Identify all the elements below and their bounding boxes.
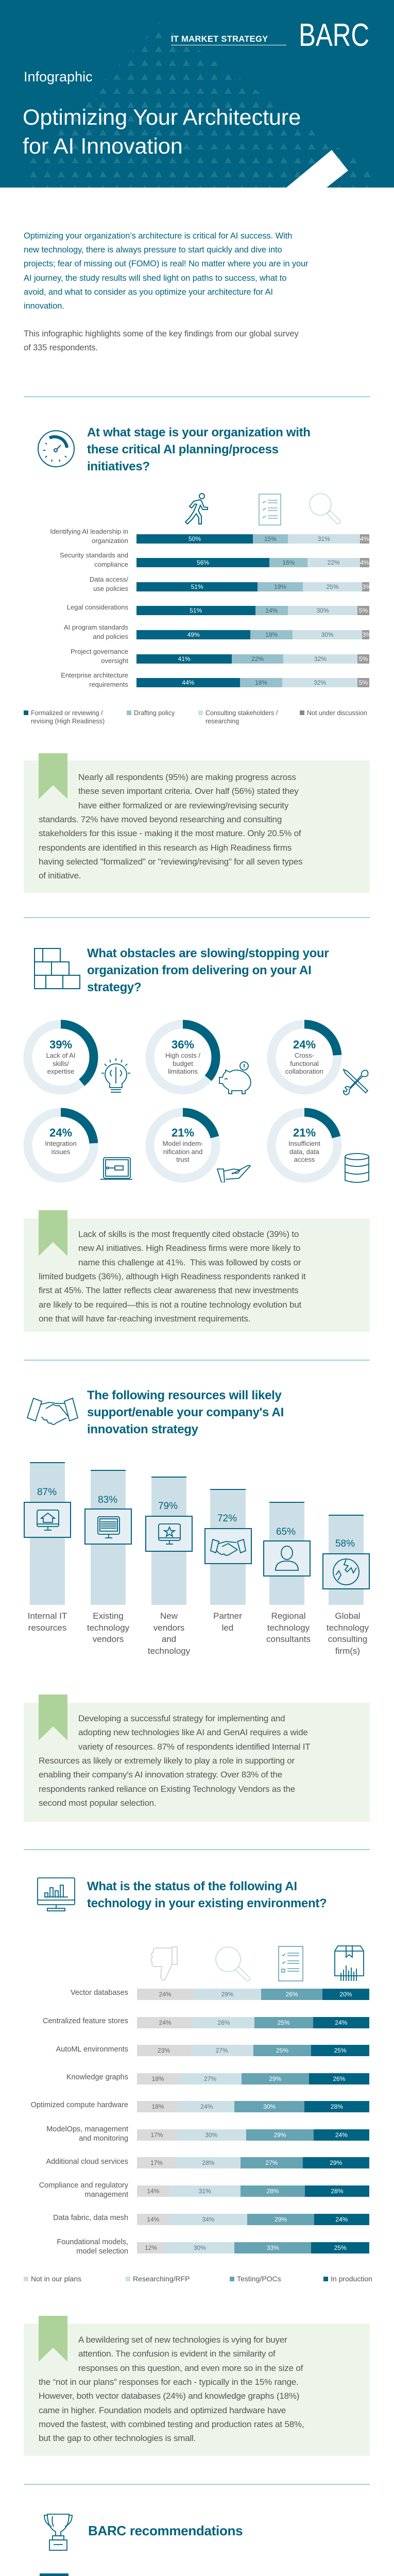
title	[23, 105, 301, 159]
chart 2 labels: ModelOps, management	[46, 2125, 128, 2133]
bars: chart 2: 30%	[205, 2131, 217, 2139]
heading: these critical AI planning/process	[87, 443, 279, 456]
icon: runner	[184, 493, 208, 524]
bars: chart 2: 31%	[199, 2188, 211, 2195]
donut: insufficient data: data, data	[289, 1148, 319, 1155]
icon: checklist	[278, 1946, 304, 1982]
icon: box	[334, 1945, 365, 1982]
bars: chart 2: 24%	[200, 2103, 213, 2110]
bars: chart 2: 18%	[152, 2075, 164, 2082]
bars: chart 2: 26%	[286, 1991, 298, 1998]
callout 3	[24, 1703, 370, 1822]
chart 2 labels: Optimized compute hardware	[31, 2101, 128, 2109]
intro text: avoid, and what to consider as you optimize your architecture for AI	[24, 287, 273, 297]
callout 2: are likely to be required—this is not a routine technology evolution but	[39, 1300, 301, 1310]
bars: chart 2: 25%	[334, 2244, 347, 2251]
callout 1: stakeholders for this issue - making it the most mature. Only 20.5% of	[39, 828, 301, 838]
bars: chart 2: 24%	[335, 2216, 348, 2223]
donut: costs: budget	[173, 1059, 193, 1067]
callout text	[78, 772, 299, 810]
icon: database	[345, 1153, 369, 1183]
survey note: of 335 respondents.	[24, 343, 98, 352]
legend: chart 1: Consulting stakeholders /	[205, 709, 278, 717]
bars: chart 2: 18%	[152, 2103, 164, 2110]
bars: chart 2: 25%	[334, 2047, 347, 2054]
donut: model indemnification: 21%	[172, 1126, 194, 1139]
donut: integration	[45, 1126, 77, 1155]
column chart: resources: 72%	[217, 1513, 237, 1524]
callout text: new AI initiatives. High Readiness firms were more likely to	[78, 1243, 300, 1253]
column chart: resources	[24, 1462, 370, 1656]
chart 2 labels: Vector databases	[71, 1989, 128, 1997]
decorative triangle pattern	[30, 23, 371, 188]
bars: chart 2: 20%	[339, 1991, 352, 1998]
bars: chart 2: 24%	[159, 1991, 172, 1998]
chart 2 column icons	[147, 1945, 366, 1984]
heading: The following resources will likely	[87, 1388, 282, 1402]
heading	[87, 1388, 284, 1436]
intro text: AI journey, the study results will shed light on paths to success, what to	[24, 274, 286, 283]
heading	[87, 426, 311, 473]
bars: chart 2: 23%	[158, 2047, 170, 2054]
chart 2 labels: Data fabric, data mesh	[53, 2214, 128, 2222]
icon: brick wall	[34, 948, 80, 989]
chart 1 row labels: Enterprise architecture	[61, 671, 128, 679]
bars: chart 2: 12%	[145, 2244, 157, 2251]
bars: chart 1: 51%	[191, 583, 203, 590]
chart 1 row labels: AI program standards	[64, 623, 128, 631]
column chart: resources: technology	[148, 1646, 190, 1656]
icon: magnifier	[309, 493, 341, 524]
column chart: resources: firm(s)	[335, 1646, 360, 1656]
chart 2 labels: Centralized feature stores	[43, 2017, 128, 2025]
heading: BARC recommendations	[88, 2523, 243, 2538]
bars: chart 2: 27%	[216, 2047, 228, 2054]
bars: chart 2: 24%	[335, 2019, 347, 2026]
chart 1 row labels: use policies	[93, 584, 128, 592]
donut: insufficient data	[288, 1126, 320, 1163]
icon: tools	[342, 1069, 369, 1095]
chart 1 row labels: Security standards and	[60, 551, 128, 559]
callout 2: one that will have far-reaching investment requirements.	[39, 1314, 250, 1324]
bars: chart 2: 17%	[150, 2131, 163, 2139]
donut: collaboration: 24%	[293, 1038, 316, 1051]
chart 2 labels: Foundational models,	[57, 2238, 128, 2246]
callout text: responses on this question, and even more so in the size of	[78, 2363, 303, 2373]
bars: chart 2: 28%	[202, 2159, 214, 2166]
callout 2	[24, 1218, 370, 1332]
chart 1 row labels	[50, 528, 128, 688]
bars: chart 2: 29%	[273, 2131, 286, 2139]
bars: chart 1: 5%	[359, 655, 368, 663]
donut: model indemnification: trust	[176, 1156, 190, 1163]
bars: chart 2: 30%	[263, 2103, 276, 2110]
callout text: name this challenge at 41%. This was followed by costs or	[78, 1258, 301, 1267]
heading: innovation strategy	[87, 1422, 198, 1436]
header banner	[0, 0, 394, 188]
icon box: existing vendors	[84, 1509, 132, 1545]
chart 1 row labels: compliance	[94, 561, 128, 568]
bars: chart 2: 17%	[150, 2159, 163, 2166]
donut: collaboration	[285, 1038, 323, 1075]
ribbon	[39, 1694, 67, 1740]
legend: chart 1: Not under discussion	[307, 709, 367, 717]
donut: lack of skills: 39%	[49, 1038, 72, 1051]
callout text: these seven important criteria. Over half (56%) stated they	[78, 786, 299, 796]
donut: integration: issues	[52, 1148, 70, 1155]
callout 1: of initiative.	[39, 871, 81, 880]
callout 2: first at 45%. The latter reflects clear awareness that new investments	[39, 1285, 298, 1295]
donut: lack of skills: Lack of AI	[46, 1052, 76, 1059]
heading: strategy?	[87, 980, 141, 994]
bars: chart 2: 14%	[147, 2216, 159, 2223]
donut: lack of skills	[46, 1038, 76, 1075]
bars: chart 2: 29%	[330, 2159, 342, 2166]
intro text: innovation.	[24, 301, 64, 311]
chart 2 labels: AutoML environments	[56, 2045, 128, 2054]
donut: lack of skills: expertise	[47, 1067, 74, 1075]
bars: chart 1: 41%	[178, 655, 191, 663]
heading: What is the status of the following AI	[87, 1879, 297, 1893]
icon: handshake	[27, 1397, 78, 1425]
icon: trophy	[43, 2512, 73, 2551]
donut: insufficient data: 21%	[293, 1126, 316, 1139]
column labels	[28, 1611, 67, 1632]
column chart: resources: Global	[335, 1611, 361, 1621]
bars: chart 2: 33%	[267, 2244, 279, 2251]
bars: chart 1: 5%	[359, 679, 368, 686]
icon: checklist	[259, 494, 281, 526]
bars: chart 2: 24%	[159, 2019, 172, 2026]
chart 2 labels: Compliance and regulatory	[39, 2181, 128, 2190]
donut: integration: Integration	[45, 1140, 77, 1147]
legend: chart 1	[24, 709, 367, 725]
callout 4: However, both vector databases (24%) and knowledge graphs (18%)	[39, 2391, 299, 2401]
donut: costs: limitations	[168, 1067, 198, 1075]
donut: model indemnification: nification and	[163, 1148, 202, 1155]
callout text: adopting new technologies like AI and GenAI requires a wide	[78, 1727, 308, 1737]
bars: chart 2: 26%	[218, 2019, 230, 2026]
intro text: projects; fear of missing out (FOMO) is real! No matter where you are in your	[24, 259, 309, 268]
bars: chart 1: 18%	[255, 679, 267, 686]
callout text: A bewildering set of new technologies is vying for buyer	[78, 2335, 287, 2345]
survey note: This infographic highlights some of the key findings from our global survey	[24, 329, 299, 338]
bars: chart 1: 32%	[314, 655, 327, 663]
callout 1	[24, 760, 370, 893]
legend: chart 1: Drafting policy	[134, 709, 175, 717]
bars: chart 1: 56%	[197, 559, 209, 566]
callout 4	[24, 2324, 370, 2456]
heading: technology in your existing environment?	[87, 1896, 327, 1910]
legend: chart 2: Researching/RFP	[133, 2275, 190, 2283]
logo: IT Market Strategy: IT MARKET STRATEGY	[171, 35, 268, 44]
bars: chart 2: 29%	[269, 2075, 281, 2082]
callout 4: the “not in our plans” responses for each - typically in the 15% range.	[39, 2377, 299, 2387]
heading: support/enable your company's AI	[87, 1405, 284, 1419]
callout 3: enabling their company's AI innovation strategy. Over 83% of the	[39, 1770, 282, 1780]
chart 1 row labels: requirements	[89, 680, 128, 688]
column chart: resources: 58%	[335, 1538, 355, 1549]
column chart: resources: and	[162, 1634, 176, 1644]
section 3: resources	[27, 1388, 284, 1436]
logo: IT Market Strategy	[171, 34, 286, 45]
label: Infographic: Infographic	[24, 69, 93, 84]
callout 1: respondents are identified in this research as High Readiness firms	[39, 843, 292, 853]
bars: chart 2: 28%	[331, 2103, 343, 2110]
bars: chart 1: 32%	[314, 679, 326, 686]
column labels: Internal IT	[28, 1611, 67, 1621]
column chart: resources: vendors	[153, 1623, 184, 1632]
chart 2 labels: Knowledge graphs	[66, 2073, 128, 2081]
bars	[30, 1462, 65, 1605]
bars: chart 1: 25%	[326, 583, 339, 590]
section 2: obstacles	[34, 946, 329, 994]
column chart: resources: Partner	[213, 1611, 242, 1621]
callout 4: came in higher. Foundation models and optimized hardware have	[39, 2405, 286, 2415]
callout 1: having selected "formalized" or "reviewing/revising" for all seven types	[39, 857, 302, 867]
column chart: resources: led	[222, 1623, 233, 1632]
chart 2 labels: management	[84, 2191, 128, 2199]
ribbon	[39, 2316, 67, 2362]
icon box: internal IT	[24, 1502, 71, 1538]
legend: chart 1: researching	[205, 718, 239, 725]
icon: thumbs down	[149, 1946, 180, 1982]
icon box: regional consultants	[263, 1540, 311, 1577]
legend: chart 1: Formalized or reviewing /	[31, 709, 103, 717]
column chart: resources: vendors	[93, 1634, 124, 1644]
bars: chart 1: 49%	[187, 631, 200, 638]
icon: hand	[216, 1165, 251, 1182]
heading: At what stage is your organization with	[87, 426, 311, 439]
bars: chart 1: 4%	[360, 559, 369, 566]
bars: chart 2: 27%	[204, 2075, 216, 2082]
bars: chart 2: 25%	[276, 2047, 288, 2054]
section 4: AI technology status	[0, 1875, 394, 1914]
bars: chart 1: 4%	[360, 535, 369, 543]
callout 3: second most popular selection.	[39, 1798, 156, 1808]
callout text	[78, 2333, 303, 2375]
heading	[87, 1878, 327, 1912]
bars: chart 1: 16%	[282, 559, 295, 566]
bars: chart 1: 44%	[182, 679, 194, 686]
icon: magnifier	[215, 1946, 251, 1982]
chart 1 row labels: and policies	[93, 633, 128, 640]
callout text	[78, 1711, 310, 1754]
bars: chart 2: 29%	[275, 2216, 287, 2223]
callout text: Nearly all respondents (95%) are making progress across	[78, 772, 296, 782]
intro text	[24, 231, 309, 311]
donut: insufficient data: access	[294, 1156, 315, 1163]
heading: What obstacles are slowing/stopping your	[87, 946, 329, 960]
bars: chart 1: 51%	[190, 607, 202, 614]
bars: chart 2: 25%	[278, 2019, 290, 2026]
column chart: resources: 65%	[276, 1527, 296, 1537]
icon box: new vendors	[145, 1516, 193, 1552]
donut: costs	[165, 1038, 200, 1075]
bars: chart 2: 30%	[194, 2244, 206, 2251]
bars: chart 2	[137, 1989, 369, 2254]
bars: chart 1: 15%	[264, 535, 277, 543]
legend: chart 2: Testing/POCs	[237, 2275, 281, 2283]
chart 1 row labels: Data access/	[90, 575, 128, 583]
intro text: Optimizing your organization’s architecture is critical for AI success. With	[24, 231, 292, 241]
title: for AI Innovation	[23, 134, 183, 159]
bars: chart 2: 14%	[147, 2188, 159, 2195]
column chart: resources: technology	[87, 1623, 129, 1632]
bars: chart 1: 31%	[318, 535, 330, 543]
column labels: resources	[28, 1623, 66, 1632]
callout text: variety of resources. 87% of respondents identified Internal IT	[78, 1742, 310, 1752]
chart 1 row labels: organization	[92, 537, 128, 544]
ribbon	[39, 753, 67, 799]
callout text: Developing a successful strategy for implementing and	[78, 1714, 285, 1723]
bars: chart 1	[136, 534, 369, 687]
donut: costs: 36%	[172, 1038, 194, 1051]
donut: integration: 24%	[49, 1126, 72, 1139]
bars: chart 1: 14%	[265, 607, 278, 614]
donut: model indemnification: Model indem-	[163, 1140, 203, 1147]
title: Optimizing Your Architecture	[23, 105, 301, 130]
donut: collaboration: collaboration	[285, 1067, 323, 1075]
bars: chart 1: 18%	[265, 631, 278, 638]
chart 2 labels: and monitoring	[79, 2134, 128, 2142]
column chart: resources: technology	[327, 1623, 369, 1632]
chart 1 row labels: oversight	[101, 656, 128, 665]
bars: chart 1: 22%	[251, 655, 264, 663]
heading: organization from delivering on your AI	[87, 963, 311, 977]
legend: chart 2	[24, 2275, 370, 2284]
donut: lack of skills: skills/	[53, 1059, 69, 1067]
legend: chart 2: Not in our plans	[31, 2275, 81, 2283]
callout 4: moved the fastest, with combined testing and production rates at 58%,	[39, 2419, 304, 2429]
bars: chart 1: 22%	[328, 559, 340, 566]
bars: chart 2: 28%	[266, 2188, 279, 2195]
icon: piggy bank	[219, 1061, 251, 1094]
icon: brain bulb	[101, 1058, 130, 1093]
callout text: Lack of skills is the most frequently cited obstacle (39%) to	[78, 1229, 299, 1239]
bars: chart 2: 27%	[265, 2159, 278, 2166]
column chart: resources: technology	[267, 1623, 310, 1632]
icon: monitor chart	[37, 1877, 75, 1911]
donut: model indemnification	[163, 1126, 203, 1163]
bars: chart 1: 5%	[359, 607, 368, 614]
column chart: resources: consultants	[266, 1634, 311, 1644]
chart 2 labels	[0, 1984, 394, 2257]
callout 1: standards. 72% have moved beyond researching and consulting	[39, 815, 282, 824]
icon: gauge	[38, 430, 75, 467]
column chart: resources: 79%	[158, 1501, 178, 1512]
callout text	[78, 1229, 301, 1267]
ribbon: 1	[40, 2573, 68, 2576]
column chart: resources: consulting	[328, 1634, 367, 1644]
heading	[87, 946, 329, 994]
legend: chart 1: revising (High Readiness)	[31, 718, 105, 725]
icon: tablet	[100, 1157, 132, 1180]
bars: chart 1: 50%	[189, 535, 201, 543]
section 5: recommendations heading	[0, 2510, 394, 2552]
column chart: resources: 83%	[98, 1495, 117, 1505]
bars: chart 2: 34%	[202, 2216, 214, 2223]
donut: collaboration: functional	[290, 1059, 319, 1067]
values: 87%	[37, 1487, 57, 1498]
icon box: global consultants	[322, 1553, 370, 1589]
chart 1 row labels: Project governance	[71, 648, 128, 655]
bars: chart 1: 30%	[317, 607, 329, 614]
chart 2 labels: model selection	[76, 2247, 128, 2256]
chart 1 row labels: Identifying AI leadership in	[50, 528, 128, 535]
column chart: resources: Existing	[93, 1611, 124, 1621]
section 1: AI planning stages	[38, 426, 341, 526]
donut: insufficient data: Insufficient	[288, 1140, 320, 1147]
chart 1 row labels: Legal considerations	[67, 603, 128, 611]
column chart: resources: New	[160, 1611, 178, 1621]
bars: chart 2: 24%	[335, 2131, 348, 2139]
callout 3: respondents ranked reliance on Existing Technology Vendors as the	[39, 1784, 295, 1794]
callout 2: limited budgets (36%), although High Readiness respondents ranked it	[39, 1272, 305, 1281]
icon box: partner led	[204, 1528, 252, 1564]
callout 3: Resources as likely or extremely likely to play a role in supporting or	[39, 1756, 295, 1766]
bars: chart 2: 28%	[331, 2188, 343, 2195]
survey note	[24, 329, 299, 352]
bars: chart 2: 29%	[221, 1991, 233, 1998]
column chart: resources: Regional	[271, 1611, 306, 1621]
intro text: new technology, there is always pressure to start quickly and dive into	[24, 245, 282, 255]
legend: chart 2: In production	[331, 2275, 372, 2283]
bars: chart 1: 19%	[274, 583, 286, 590]
donut: collaboration: Cross-	[295, 1052, 314, 1059]
callout text: attention. The confusion is evident in the similarity of	[78, 2349, 276, 2359]
bars: chart 2: 26%	[333, 2075, 345, 2082]
donut charts	[24, 1020, 369, 1183]
chart 2 labels: Additional cloud services	[46, 2158, 128, 2166]
heading: initiatives?	[87, 460, 150, 473]
donut: costs: High costs /	[165, 1052, 200, 1059]
ribbon	[39, 1210, 67, 1256]
callout text: have either formalized or are reviewing/revising security	[78, 801, 288, 810]
bars: chart 1: 30%	[321, 631, 334, 638]
callout 4: but the gap to other technologies is small.	[39, 2433, 196, 2443]
